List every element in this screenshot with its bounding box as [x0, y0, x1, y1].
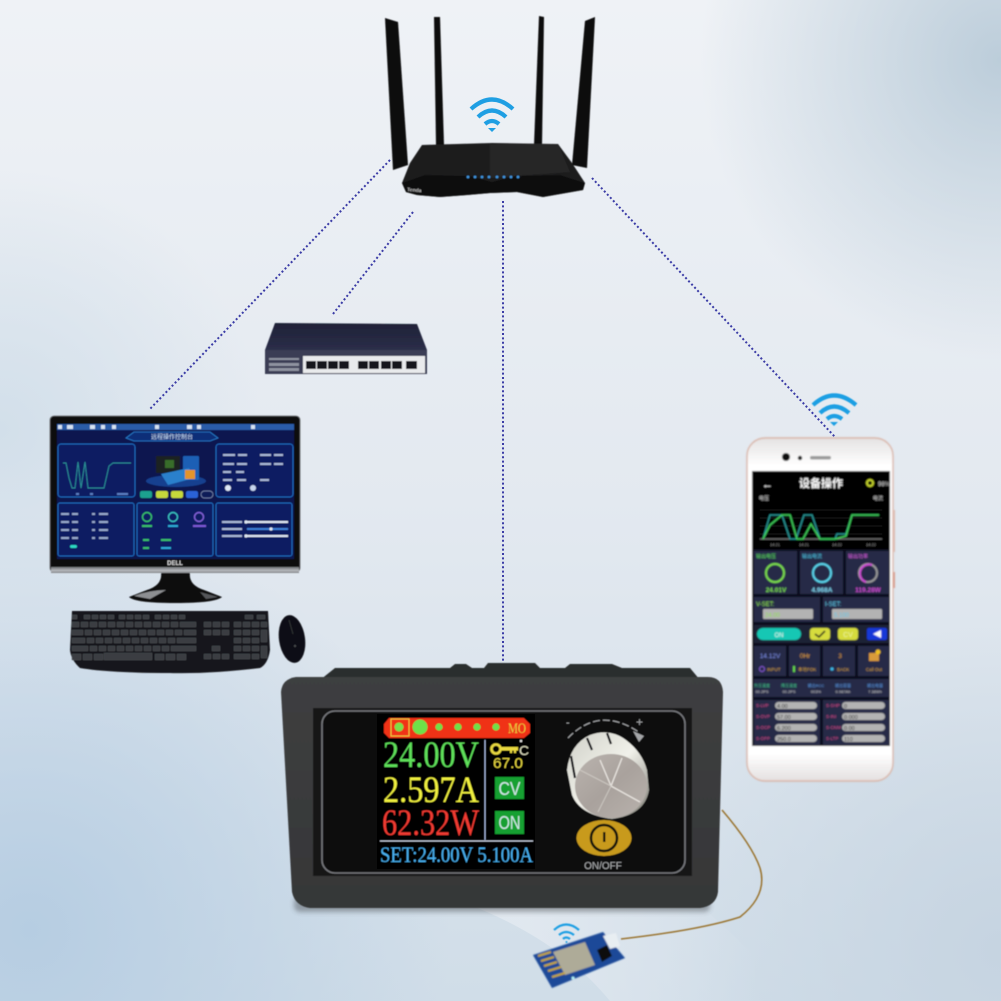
settings list: 0.00: [844, 726, 855, 732]
status cards: INPUT: [767, 667, 781, 672]
settings list: 6.200: [777, 726, 791, 732]
app header: [752, 471, 891, 493]
settings list: 57.00: [777, 715, 791, 721]
on/off label: ON/OFF: [584, 861, 622, 872]
smartphone: [747, 438, 895, 781]
settings list: S-OPP: [756, 736, 770, 741]
temperature: [492, 740, 529, 772]
status bar: MO: [508, 721, 526, 737]
brand: DELL: [167, 561, 183, 567]
power reading: 62.32W: [382, 802, 479, 843]
ribs: [571, 733, 611, 778]
app header: 设备操作: [799, 476, 843, 490]
wifi module board: [533, 932, 625, 988]
side buttons: [893, 510, 895, 552]
buttons: [140, 491, 152, 498]
ON badge: ON: [498, 813, 520, 833]
panel: output gauges: [137, 503, 213, 556]
temperature: 67.0: [493, 755, 523, 772]
stats row: 降压速度: [781, 682, 797, 688]
set inputs: 5.100: [834, 613, 850, 619]
phone chart: 电流: [873, 495, 883, 502]
gauge cards: [754, 551, 889, 594]
brushed highlights: [600, 758, 640, 802]
panel: parameter list: [216, 444, 293, 497]
set inputs: [754, 597, 889, 622]
settings list: S-INI: [826, 714, 836, 719]
settings list: S-LVP: [756, 703, 769, 708]
router body: [402, 143, 585, 197]
status cards: 本地FOK: [798, 666, 816, 673]
set inputs: 24.00: [765, 613, 781, 619]
settings list: S-CNM: [826, 725, 841, 730]
icon: wifi phone: [813, 396, 856, 426]
top connector ridge: [320, 663, 700, 680]
black panel: [313, 708, 692, 876]
phone chart: 电压: [759, 495, 769, 502]
dial arrow: -: [566, 717, 570, 729]
camera and speaker: [782, 453, 831, 461]
settings list: S-OVP: [756, 714, 770, 719]
antennas: [385, 16, 595, 170]
CV badge: CV: [498, 779, 520, 799]
phone chart: 14:21: [799, 542, 810, 547]
control buttons: CV: [843, 632, 853, 639]
icon: wifi router: [471, 100, 513, 132]
current reading: 2.597A: [383, 769, 480, 810]
dashboard title: 远程操作控制台: [151, 433, 193, 441]
stats row: 输出RCC: [808, 682, 824, 688]
desktop computer: [50, 396, 895, 988]
power card: 输出功率: [848, 553, 868, 560]
phone chart: [752, 493, 890, 549]
indicator lights: [269, 358, 299, 371]
stats row: 输出电量: [867, 682, 883, 688]
control buttons: ON: [774, 633, 784, 639]
rotary knob: [567, 732, 649, 819]
settings list: 4.00: [777, 704, 788, 710]
stats row: 升压速度: [754, 682, 770, 688]
status cards: 0Hr: [800, 653, 811, 660]
dashboard title: [126, 432, 218, 441]
brand label: Tenda: [407, 187, 422, 194]
status cards: 14.12V: [760, 653, 781, 660]
knob face: [575, 754, 647, 818]
module wire: [621, 810, 762, 939]
app header: ←: [762, 479, 773, 491]
status cards: 3: [838, 653, 842, 660]
voltage card: 24.01V: [766, 587, 787, 594]
settings list: 0.000: [844, 715, 858, 721]
settings list: 110: [844, 737, 853, 743]
knob skirt: [567, 732, 649, 819]
status bar: [384, 718, 530, 738]
panel: sliders: [216, 503, 292, 556]
temperature: C: [519, 743, 529, 758]
stats row: 00.2PS: [755, 689, 769, 694]
power card: 119.28W: [855, 587, 882, 594]
mouse: [276, 613, 308, 665]
dial arrow: +: [636, 715, 643, 729]
voltage reading: 24.00V: [383, 734, 479, 775]
phone chart: 14:21: [770, 542, 781, 547]
settings list: S-LTP: [826, 736, 838, 741]
setpoint readout: SET:24.00V 5.100A: [380, 842, 533, 867]
current card: [800, 551, 843, 594]
stats row: 7.38Wh: [868, 689, 882, 694]
power button: [576, 820, 632, 856]
stats row: [754, 679, 889, 697]
monitor bezel: [50, 416, 300, 572]
LCD display: [377, 714, 535, 869]
settings list: S-OCP: [756, 725, 770, 730]
keyboard: [70, 611, 270, 673]
status cards: [754, 646, 889, 676]
current card: 输出电流: [802, 553, 822, 560]
power card: [846, 551, 889, 594]
stats row: 003%: [811, 689, 822, 694]
current card: 4.968A: [812, 587, 833, 594]
voltage card: 输出电压: [756, 553, 776, 560]
phone chart: 14:22: [866, 542, 877, 547]
enclosure shadow: [294, 896, 710, 912]
panel: curve chart: [58, 444, 135, 497]
connection lines: [149, 160, 835, 661]
power module: [281, 663, 723, 912]
panel: memory groups: [58, 503, 134, 556]
dial arrow: [566, 715, 644, 742]
voltage card: [754, 551, 797, 594]
router: [385, 16, 595, 197]
set inputs: I-SET:: [825, 602, 842, 608]
monitor screen: [57, 424, 294, 559]
status LEDs: [467, 176, 519, 178]
settings list: 0: [844, 704, 847, 710]
enclosure frame: [281, 677, 723, 908]
network switch: [265, 323, 427, 374]
set inputs: V-SET:: [756, 602, 775, 608]
ports: [306, 361, 417, 369]
icon: wifi module: [554, 924, 579, 943]
app header: 98%: [878, 482, 891, 488]
settings list: 250.0: [777, 737, 791, 743]
phone chart: 14:22: [832, 542, 843, 547]
settings list: [754, 700, 889, 745]
panel: product image: [140, 456, 213, 498]
control buttons: [754, 625, 889, 643]
stats row: 0.987Ah: [836, 689, 850, 694]
settings list: S-SHP: [826, 703, 840, 708]
status cards: BACK: [837, 667, 849, 672]
phone screen: [752, 471, 890, 746]
phone body: [747, 438, 893, 781]
status cards: Call Out: [866, 667, 883, 672]
stats row: 00.2PS: [782, 689, 796, 694]
monitor stand: [129, 572, 222, 603]
stats row: 输出容量: [835, 682, 851, 688]
